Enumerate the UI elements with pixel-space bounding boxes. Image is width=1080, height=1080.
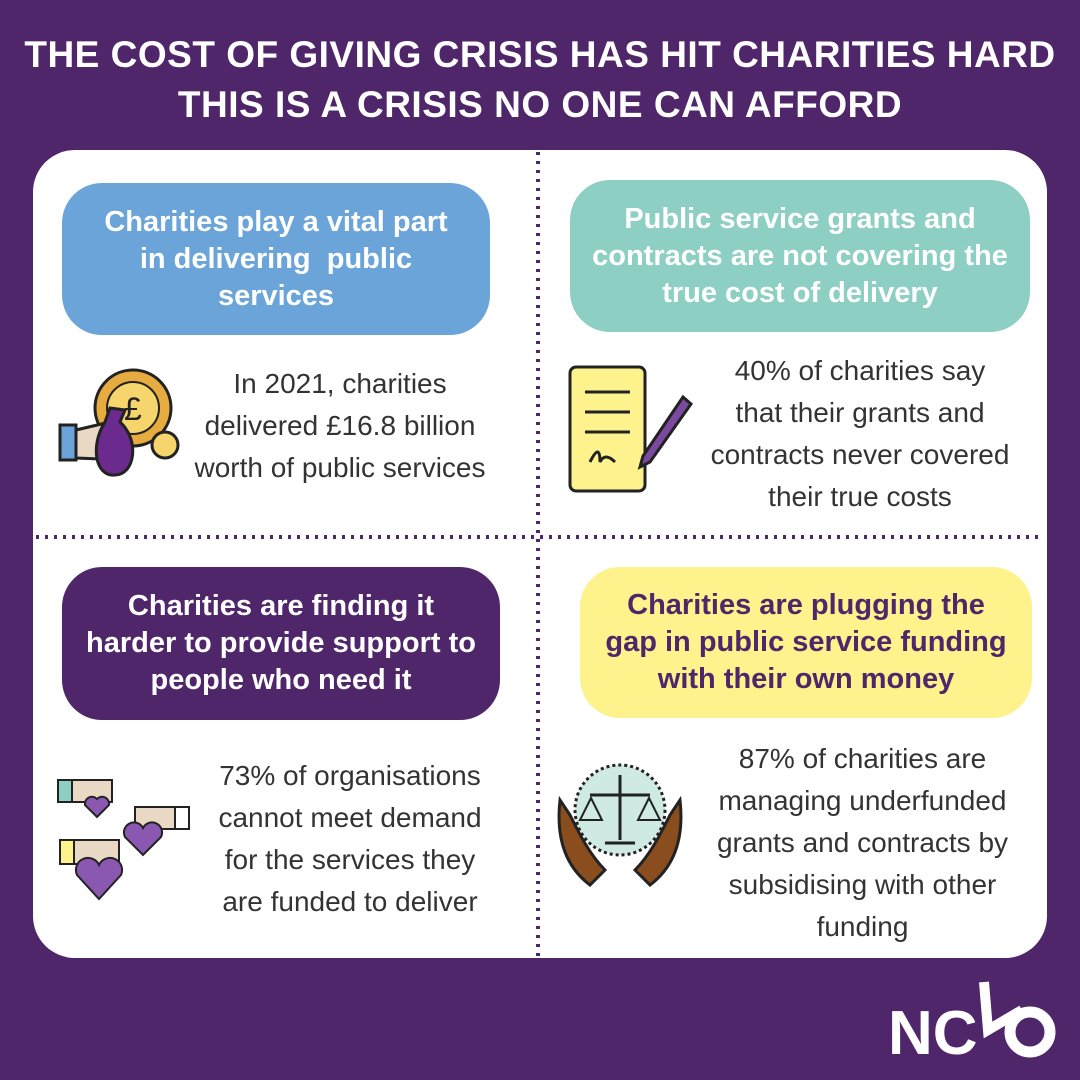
text: panel 4: 87% of charities are: [739, 743, 986, 774]
heading: panel 1: in delivering public: [140, 242, 412, 274]
icon: hands and scales: [558, 764, 682, 887]
heading: panel 2: [570, 180, 1030, 332]
icon: hands with hearts: [57, 779, 190, 900]
text: panel 1: In 2021, charities: [233, 368, 447, 399]
heading: panel 4: [580, 567, 1032, 718]
text: panel 2: their true costs: [768, 481, 952, 512]
heading: panel 3: Charities are finding it: [128, 590, 434, 622]
icon: contract: [568, 366, 693, 492]
heading: panel 1: Charities play a vital part: [104, 206, 448, 238]
panel card: [33, 150, 1047, 958]
heading: panel 4: Charities are plugging the: [627, 589, 985, 621]
text: panel 3: cannot meet demand: [218, 802, 482, 833]
logo: NCVO: NC: [888, 999, 978, 1068]
heading: panel 1: services: [218, 280, 334, 312]
heading: panel 2: Public service grants and: [624, 202, 976, 234]
text: panel 2: that their grants and: [735, 397, 985, 428]
title: THIS IS A CRISIS NO ONE CAN AFFORD: [178, 84, 902, 125]
heading: panel 3: harder to provide support to: [86, 627, 476, 659]
text: panel 3: 73% of organisations: [219, 760, 481, 791]
text: panel 4: subsidising with other: [729, 869, 996, 900]
text: panel 3: are funded to deliver: [222, 886, 478, 917]
heading: panel 2: true cost of delivery: [662, 276, 938, 308]
text: panel 1: [194, 368, 486, 483]
text: panel 4: [717, 743, 1008, 942]
icon: money bag and coin: [58, 368, 180, 477]
heading: panel 3: people who need it: [150, 664, 412, 696]
heading: panel 3: [62, 567, 500, 720]
heading: panel 4: with their own money: [658, 663, 954, 695]
icon: money bag and coin: £: [124, 391, 142, 427]
text: panel 3: [218, 760, 482, 917]
text: panel 4: funding: [817, 911, 908, 942]
text: panel 1: worth of public services: [194, 452, 486, 483]
text: panel 1: delivered £16.8 billion: [205, 410, 475, 441]
text: panel 4: grants and contracts by: [717, 827, 1008, 858]
text: panel 2: contracts never covered: [711, 439, 1009, 470]
heading: panel 2: contracts are not covering the: [592, 240, 1008, 272]
heading: panel 4: gap in public service funding: [605, 626, 1007, 658]
logo: NCVO: [888, 982, 1056, 1068]
title: THE COST OF GIVING CRISIS HAS HIT CHARITIES HARD: [24, 34, 1056, 75]
text: panel 3: for the services they: [225, 844, 475, 875]
title: [24, 34, 1056, 125]
heading: panel 1: [62, 183, 490, 335]
text: panel 2: [711, 355, 1009, 512]
text: panel 4: managing underfunded: [718, 785, 1006, 816]
text: panel 2: 40% of charities say: [735, 355, 985, 386]
